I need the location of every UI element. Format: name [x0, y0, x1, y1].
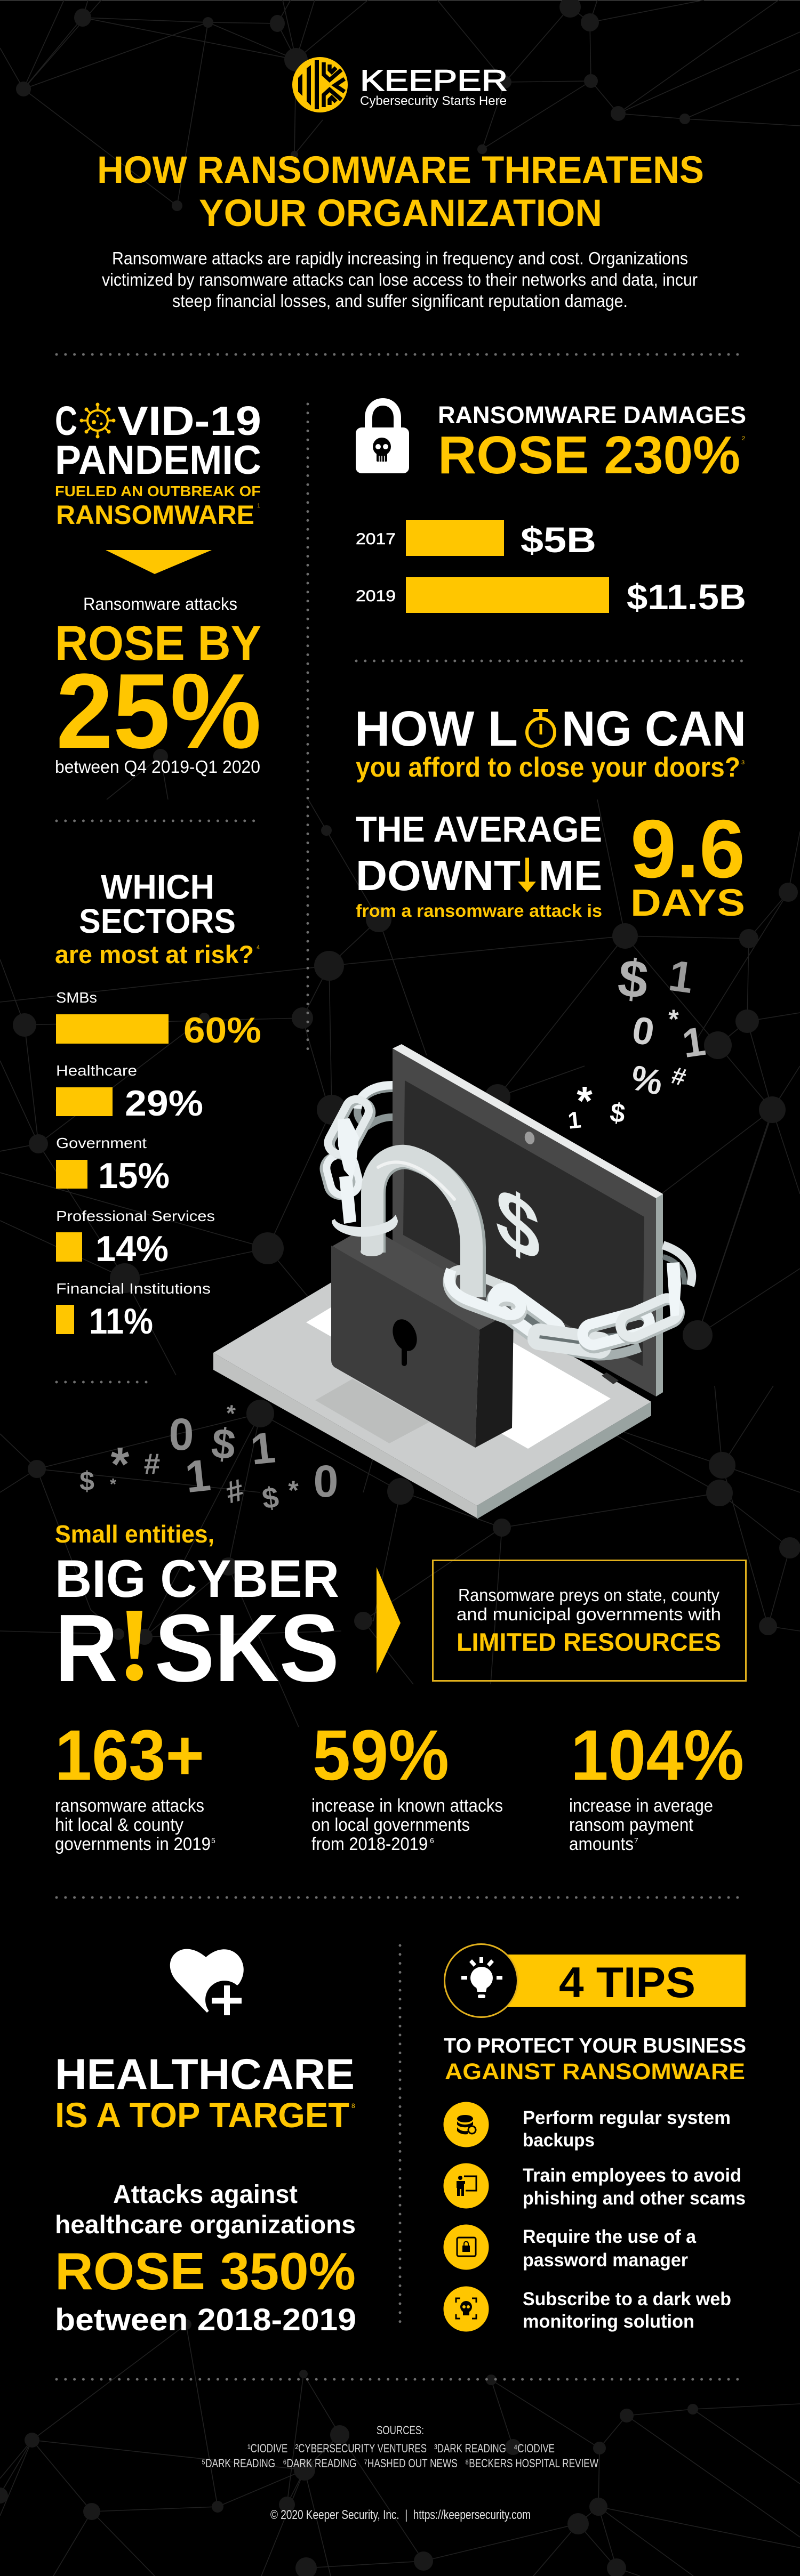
stat: 104%: 104%	[571, 1716, 744, 1795]
screen camera	[523, 1130, 536, 1145]
chain: front links	[450, 1262, 684, 1353]
floating characters: lower left: 1	[249, 1423, 277, 1474]
arrow: down triangle	[106, 550, 212, 574]
floating characters: upper right: 1	[566, 1107, 582, 1134]
footer: © 2020 Keeper Security, Inc. | https://keepersecurity.com	[270, 2508, 531, 2522]
floating characters: lower left: $	[260, 1480, 281, 1515]
bar chart: sectors: 11%	[89, 1301, 153, 1342]
footnote 2: 2	[742, 435, 745, 442]
text: healthcare organizations: healthcare organizations	[55, 2211, 356, 2239]
intro paragraph	[102, 248, 698, 311]
floating characters: upper right: 0	[629, 1008, 658, 1054]
tip 4: monitoring solution	[523, 2311, 694, 2332]
tip 2: phishing and other scams	[523, 2188, 746, 2209]
stat: rose 350%: ROSE 350%	[55, 2242, 356, 2300]
stat: 163+: hit local & county	[55, 1815, 183, 1835]
tip 2: Train employees to avoid	[523, 2165, 741, 2186]
heading: how long can: HOW L	[355, 701, 518, 756]
icon: virus	[80, 403, 115, 438]
icon: lightbulb	[461, 1957, 502, 1998]
laptop screen	[393, 1044, 663, 1396]
floating characters: upper right: 1	[679, 1019, 708, 1067]
tip 4	[444, 2287, 731, 2332]
heading: TO PROTECT YOUR BUSINESS	[444, 2034, 746, 2057]
keyhole	[388, 1315, 421, 1366]
stat: 59%: 59%	[313, 1716, 449, 1795]
floating characters: upper right: $	[615, 948, 651, 1011]
padlock body	[331, 1226, 514, 1448]
icon: keeper emblem	[292, 57, 348, 112]
stat: 59%	[311, 1716, 503, 1854]
stat: 104%: ransom payment	[569, 1815, 693, 1835]
wordmark: KEEPER	[360, 63, 508, 97]
heading: RANSOMWARE DAMAGES	[438, 401, 746, 429]
stat: 59%: increase in known attacks	[311, 1796, 503, 1816]
bar chart: sectors: 15%	[98, 1156, 170, 1196]
floating characters: upper right: %	[628, 1057, 666, 1102]
bar chart: damages: $11.5B	[627, 577, 746, 617]
intro paragraph: victimized by ransomware attacks can lose access to their networks and data, incur	[102, 270, 698, 289]
callout: Ransomware preys on state, county	[458, 1585, 719, 1605]
bar chart: sectors: 60%	[183, 1010, 261, 1051]
icon: down arrow	[518, 858, 536, 892]
heading: big cyber: BIG CYBER	[55, 1549, 339, 1608]
tip 3	[444, 2225, 697, 2271]
floating characters: upper right: 1	[666, 951, 697, 1003]
floating characters: lower left: #	[222, 1472, 247, 1511]
heading: risks	[55, 1595, 339, 1702]
floating characters: lower left: $	[79, 1466, 94, 1496]
tip 1	[444, 2102, 731, 2151]
panel: ransomware damages	[356, 401, 746, 617]
stat: 163+: governments in 2019	[55, 1834, 211, 1854]
text: attacks against: Attacks against	[113, 2181, 298, 2209]
floating characters: upper right: #	[669, 1061, 689, 1091]
tip 4: Subscribe to a dark web	[523, 2289, 731, 2309]
heading: covid-19	[55, 398, 261, 444]
floating characters: upper right	[566, 948, 708, 1134]
bar chart: damages: 2017	[356, 530, 396, 548]
sources: ⁵DARK READING ⁶DARK READING ⁷HASHED OUT NEWS ⁸BECKERS HOSPITAL REVIEW	[202, 2457, 598, 2470]
stat: rose 230%: ROSE 230%	[438, 425, 740, 485]
floating characters: upper right: *	[577, 1079, 593, 1124]
stat: 163+	[55, 1716, 215, 1854]
stat: 25%: 25%	[56, 652, 261, 771]
text: ransomware attacks: Ransomware attacks	[83, 594, 237, 613]
panel: sectors at risk	[55, 868, 261, 1342]
arrow	[377, 1567, 401, 1674]
bar chart: sectors: 29%	[125, 1083, 203, 1124]
text: between years: between 2018-2019	[55, 2303, 356, 2337]
icon: stopwatch	[527, 710, 555, 746]
stat: 163+: 163+	[55, 1716, 204, 1795]
icon: skull scan	[456, 2298, 476, 2319]
stat: days: DAYS	[630, 882, 745, 924]
heading: covid-19: VID-19	[117, 398, 261, 444]
header logo	[292, 57, 508, 112]
sources: ¹CIODIVE ²CYBERSECURITY VENTURES ³DARK READING ⁴CIODIVE	[247, 2442, 555, 2455]
panel: how long can	[355, 701, 746, 783]
panel: small entities big cyber risks	[55, 1520, 746, 1702]
stat: 163+: 5	[211, 1836, 215, 1845]
padlock shackle	[361, 1156, 475, 1297]
icon: presenter	[457, 2176, 476, 2196]
chain: ring on shackle	[332, 1215, 398, 1237]
stat: 104%: amounts	[569, 1834, 634, 1854]
panel: healthcare	[55, 1949, 356, 2337]
heading: which sectors: WHICH	[101, 868, 214, 906]
heading: how long can	[355, 701, 746, 756]
intro paragraph: Ransomware attacks are rapidly increasing in frequency and cost. Organizations	[112, 248, 688, 268]
heading: risks: R	[55, 1595, 118, 1702]
bar chart: sectors	[56, 989, 261, 1342]
subheading: from a ransomware attack is	[356, 901, 602, 920]
subheading: FUELED AN OUTBREAK OF	[55, 483, 261, 499]
subheading: AGAINST RANSOMWARE	[445, 2059, 745, 2085]
stat: 104%: 7	[634, 1836, 638, 1845]
banner: 4 tips: 4 TIPS	[559, 1959, 695, 2007]
panel: average downtime	[356, 803, 745, 924]
icon: safe with lock	[457, 2238, 476, 2256]
subheading: ransomware: RANSOMWARE	[56, 500, 254, 530]
floating characters: lower left: $	[209, 1419, 238, 1469]
bar chart: sectors: 14%	[95, 1229, 169, 1269]
subheading: are most at risk?	[55, 940, 254, 968]
sources: SOURCES:	[377, 2424, 424, 2437]
stat: 59%: on local governments	[311, 1815, 470, 1835]
title: HOW RANSOMWARE THREATENS	[97, 149, 704, 191]
heading line 2: SECTORS	[79, 902, 236, 940]
stat: 104%	[569, 1716, 744, 1854]
footnote 4: 4	[257, 944, 260, 951]
floating characters: lower left: *	[223, 1400, 238, 1427]
subheading: IS A TOP TARGET	[55, 2095, 349, 2135]
chain: back left links	[321, 1085, 393, 1224]
heading: HEALTHCARE	[55, 2050, 355, 2098]
floating characters: lower left: *	[110, 1438, 130, 1491]
banner: 4 tips	[445, 1944, 746, 2017]
heading: downtime: ME	[539, 852, 602, 899]
stat: 9.6: 9.6	[630, 803, 745, 895]
floating characters: lower left: 0	[169, 1409, 194, 1459]
bar chart: damages	[356, 520, 746, 617]
stat: 163+: ransomware attacks	[55, 1796, 204, 1816]
screen dollar sign: $	[495, 1167, 540, 1281]
icon: database backup	[457, 2115, 476, 2134]
panel: covid-19 pandemic	[55, 398, 261, 777]
floating characters: lower left	[79, 1400, 338, 1515]
title	[97, 149, 704, 235]
footnote 3: 3	[741, 760, 745, 766]
title: YOUR ORGANIZATION	[199, 192, 602, 235]
heading: downtime: DOWNT	[356, 852, 521, 899]
sources	[202, 2424, 598, 2470]
laptop base	[213, 1249, 651, 1519]
text: between quarters: between Q4 2019-Q1 2020	[55, 757, 260, 777]
tip 3: Require the use of a	[523, 2226, 697, 2247]
tip 1: Perform regular system	[523, 2107, 731, 2128]
illustration: locked laptop	[213, 1044, 692, 1519]
floating characters: upper right: *	[668, 1004, 679, 1034]
footnote 1: 1	[257, 503, 260, 509]
heading: covid-19: C	[55, 398, 77, 444]
tagline: Cybersecurity Starts Here	[360, 94, 507, 108]
bar chart: sectors: SMBs	[56, 989, 97, 1006]
intro paragraph: steep financial losses, and suffer significant reputation damage.	[172, 291, 628, 311]
floating characters: lower left: *	[288, 1475, 299, 1505]
stat: 59%: 6	[430, 1836, 434, 1845]
tip 2	[444, 2163, 746, 2209]
panel: 4 tips	[444, 1944, 746, 2332]
floating characters: lower left: #	[144, 1447, 160, 1480]
callout: and municipal governments with	[457, 1604, 721, 1624]
floating characters: upper right: $	[608, 1097, 627, 1129]
chain: back right links	[443, 1245, 692, 1356]
heading: pandemic: PANDEMIC	[55, 438, 261, 483]
heading: downtime	[356, 852, 602, 899]
stat: rose by: ROSE BY	[55, 616, 261, 671]
tip 1: backups	[523, 2130, 595, 2151]
bar chart: damages: 2019	[356, 587, 396, 605]
icon: padlock with skull	[356, 402, 409, 473]
floating characters: lower left: 1	[183, 1450, 213, 1502]
floating characters: lower left: *	[110, 1475, 116, 1493]
icon: heart with plus	[170, 1949, 244, 2019]
subheading: Small entities,	[55, 1520, 214, 1548]
bar chart: sectors: Professional Services	[56, 1208, 215, 1224]
heading: risks: SKS	[155, 1595, 339, 1702]
floating characters: lower left: 0	[314, 1456, 338, 1506]
stat: 104%: increase in average	[569, 1796, 713, 1816]
callout: LIMITED RESOURCES	[457, 1628, 721, 1656]
tip 3: password manager	[523, 2250, 688, 2271]
bar chart: sectors: Government	[56, 1135, 147, 1151]
heading: the average: THE AVERAGE	[356, 809, 602, 850]
callout	[433, 1561, 746, 1681]
subheading: you afford to close your doors?	[356, 752, 740, 783]
heading: how long can: NG CAN	[562, 701, 746, 756]
bar chart: sectors: Healthcare	[56, 1062, 137, 1079]
stat: 59%: from 2018-2019	[311, 1834, 428, 1854]
footnote 8: 8	[351, 2102, 355, 2110]
bar chart: sectors: Financial Institutions	[56, 1280, 211, 1297]
bar chart: damages: $5B	[521, 520, 596, 560]
